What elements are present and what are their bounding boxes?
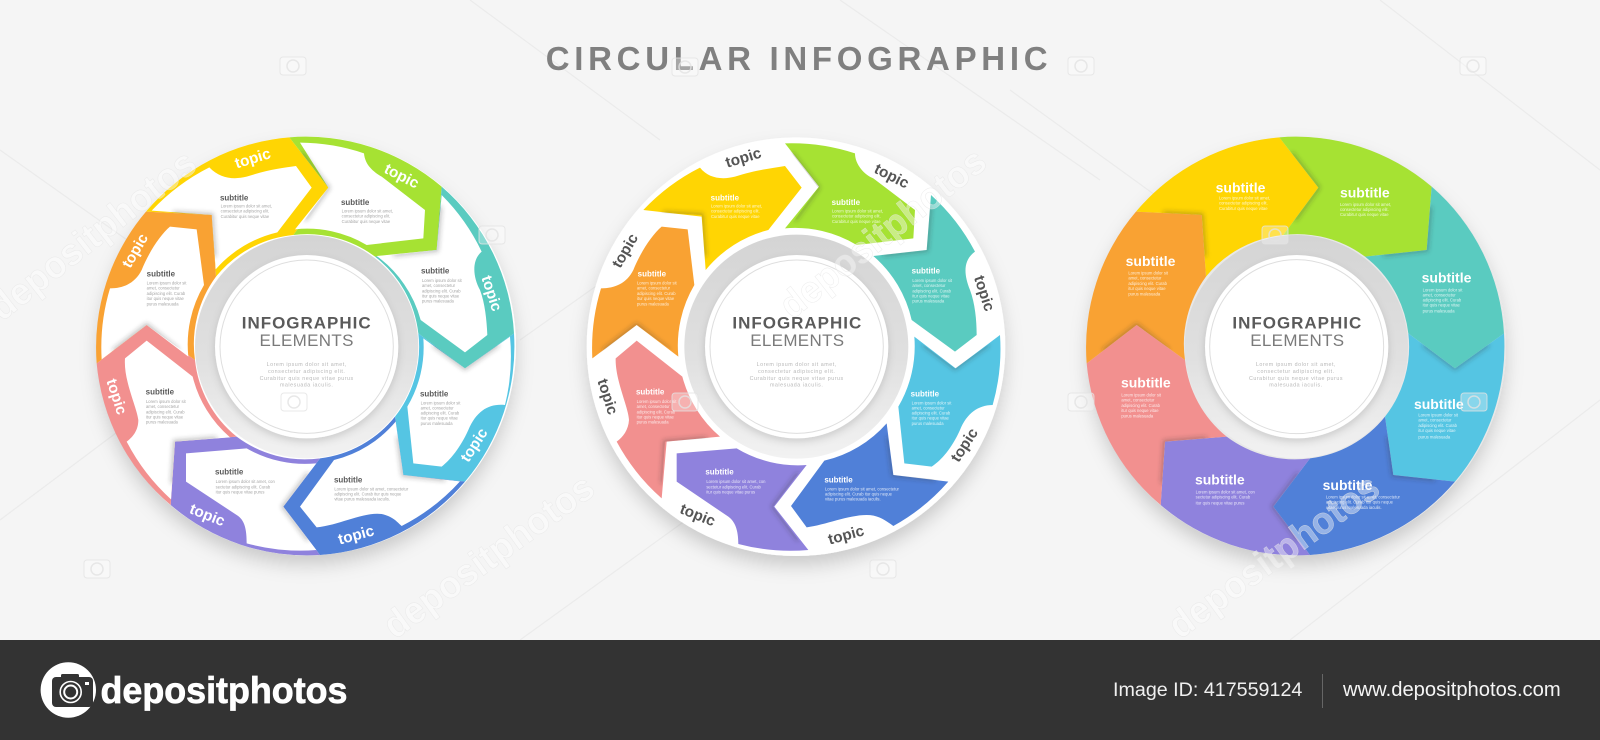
segment: yellow: Lorem ipsum dolor sit amet, <box>221 204 272 209</box>
segment: yellow: Curabitur quis neque vitae <box>221 214 270 219</box>
segment: purple <box>171 437 320 555</box>
segment: orange: purus malesuada <box>1128 292 1161 297</box>
segment: yellow: Lorem ipsum dolor sit amet, <box>1219 196 1270 201</box>
center text: INFOGRAPHIC <box>242 313 372 332</box>
segment: blue: subtitle <box>1323 477 1373 493</box>
segment: blue: subtitle <box>334 475 363 484</box>
segment: pink: topic <box>593 377 621 417</box>
center text: consectetur adipiscing elit. <box>1257 369 1335 375</box>
segment: teal <box>1365 187 1504 368</box>
segment: orange: topic <box>119 230 152 271</box>
segment: blue <box>791 423 948 548</box>
segment: purple: topic <box>677 501 718 530</box>
segment: green: subtitle <box>832 198 861 207</box>
segment: orange: purus malesuada <box>147 301 179 306</box>
segment: purple: itur quis neque vitae purus <box>216 490 264 495</box>
segment: purple: Lorem ipsum dolor sit amet, con <box>216 479 275 484</box>
segment: orange: purus malesuada <box>637 301 670 306</box>
segment: blue: topic <box>336 522 376 548</box>
segment: purple: sectetur adipiscing elit. Curab <box>216 484 271 489</box>
segment: green: Curabitur quis neque vitae <box>832 219 881 224</box>
watermark text and camera marks: depositphotos <box>1161 466 1388 647</box>
segment: yellow: topic <box>233 145 273 172</box>
segment: green: consectetur adipiscing elit. <box>1340 207 1389 212</box>
segment: pink: subtitle <box>1121 375 1171 391</box>
segment: orange: adipiscing elit. Curab <box>1128 281 1168 286</box>
segment: light blue: subtitle <box>1414 396 1464 412</box>
segment: green: subtitle <box>1340 184 1390 200</box>
segment: pink <box>593 341 720 498</box>
segment: yellow: Lorem ipsum dolor sit amet, <box>711 204 762 209</box>
center text: INFOGRAPHIC <box>1232 313 1362 332</box>
segment: yellow: consectetur adipiscing elit. <box>1219 201 1268 206</box>
segment: light blue: amet, consectetur <box>1418 418 1452 423</box>
segment: orange: itur quis neque vitae <box>147 296 185 301</box>
segment: teal: adipiscing elit. Curab <box>1423 298 1462 303</box>
segment: pink: Lorem ipsum dolor sit <box>146 399 187 404</box>
segment: teal <box>873 195 998 352</box>
segment: light blue: purus malesuada <box>1418 434 1451 439</box>
segment: light blue: subtitle <box>420 390 449 399</box>
segment: yellow: subtitle <box>220 193 249 202</box>
segment: green: Lorem ipsum dolor sit amet, <box>832 209 883 214</box>
watermark text and camera marks: depositphotos <box>376 466 603 647</box>
segment: light blue: itur quis neque vitae <box>912 416 950 421</box>
segment: orange: subtitle <box>1126 253 1176 269</box>
segment: yellow: consectetur adipiscing elit. <box>711 209 760 214</box>
segment: light blue: amet, consectetur <box>421 405 454 410</box>
center text: consectetur adipiscing elit. <box>268 369 345 375</box>
watermark text and camera marks: depositphotos <box>772 140 995 327</box>
segment: yellow: topic <box>723 145 764 172</box>
segment: green: consectetur adipiscing elit. <box>832 214 881 219</box>
panel: outlined circular infographic <box>96 137 516 555</box>
segment: yellow: consectetur adipiscing elit. <box>221 209 269 214</box>
segment: orange: adipiscing elit. Curab <box>147 291 186 296</box>
segment: green <box>289 137 442 257</box>
center text: Lorem ipsum dolor sit amet, <box>757 362 837 368</box>
segment: teal: subtitle <box>1422 269 1472 285</box>
segment: blue: subtitle <box>824 475 853 484</box>
segment: orange <box>592 227 694 358</box>
segment: teal: Lorem ipsum dolor sit <box>912 278 953 283</box>
segment: blue: adipiscing elit. Curab itur quis neque <box>825 491 893 496</box>
segment: teal: adipiscing elit. Curab <box>422 288 461 293</box>
center text: ELEMENTS <box>750 331 844 350</box>
segment: purple: sectetur adipiscing elit. Curab <box>706 484 762 489</box>
center text <box>732 313 862 389</box>
center text: Lorem ipsum dolor sit amet, <box>1256 362 1336 368</box>
segment: purple: Lorem ipsum dolor sit amet, con <box>1196 490 1255 495</box>
segment: orange: topic <box>609 230 642 271</box>
segment: teal: itur quis neque vitae <box>912 293 950 298</box>
segment: orange: amet, consectetur <box>147 286 180 291</box>
segment: purple: subtitle <box>215 467 244 476</box>
segment: purple <box>677 448 808 551</box>
segment: blue: Lorem ipsum dolor sit amet, consectetur <box>1326 494 1401 499</box>
segment: pink: adipiscing elit. Curab <box>146 409 185 414</box>
panel: filled arrows on white disc <box>587 137 1005 556</box>
center disc <box>1205 255 1388 438</box>
segment: light blue: Lorem ipsum dolor sit <box>1418 413 1459 418</box>
segment: light blue: topic <box>948 425 982 465</box>
segment: blue: adipiscing elit. Curab itur quis neque <box>334 491 402 496</box>
center text: malesuada iaculis. <box>770 383 823 389</box>
center text: malesuada iaculis. <box>280 383 333 389</box>
segment: teal: purus malesuada <box>912 299 945 304</box>
segment: blue: vitae purus malesuada iaculis. <box>1326 505 1382 510</box>
segment: purple: sectetur adipiscing elit. Curab <box>1196 495 1251 500</box>
segment: green: topic <box>871 161 912 193</box>
title: CIRCULAR INFOGRAPHIC <box>546 40 1052 77</box>
center text: ELEMENTS <box>1250 331 1344 350</box>
center ring <box>1185 235 1408 458</box>
segment: orange <box>96 212 216 363</box>
segment: purple: subtitle <box>1195 472 1245 488</box>
segment: pink: adipiscing elit. Curab <box>637 409 676 414</box>
segment: light blue: adipiscing elit. Curab <box>912 411 951 416</box>
segment: teal <box>375 187 514 368</box>
segment: pink: subtitle <box>146 388 175 397</box>
segment: purple: itur quis neque vitae purus <box>1196 500 1244 505</box>
segment: light blue: Lorem ipsum dolor sit <box>912 400 952 405</box>
center ring <box>195 235 418 458</box>
segment: yellow: Curabitur quis neque vitae <box>1219 206 1268 211</box>
segment: blue <box>283 417 465 555</box>
segment: pink: itur quis neque vitae <box>1121 408 1159 413</box>
segment: orange: Lorem ipsum dolor sit <box>1128 271 1169 276</box>
segment: teal: Lorem ipsum dolor sit <box>1423 287 1463 292</box>
logo wordmark: depositphotos <box>100 670 348 711</box>
center disc <box>215 255 398 438</box>
segment: purple <box>1161 437 1310 555</box>
segment: pink: amet, consectetur <box>637 404 670 409</box>
segment: pink: purus malesuada <box>1121 414 1154 419</box>
center text: Lorem ipsum dolor sit amet, <box>267 362 347 368</box>
segment: light blue: purus malesuada <box>912 421 944 426</box>
center text: ELEMENTS <box>260 331 354 350</box>
segment: light blue: itur quis neque vitae <box>1418 428 1456 433</box>
segment: pink: subtitle <box>636 388 665 397</box>
center text: INFOGRAPHIC <box>732 313 862 332</box>
segment: orange: itur quis neque vitae <box>637 296 675 301</box>
segment: blue: vitae purus malesuada iaculis. <box>334 497 390 502</box>
segment: green: consectetur adipiscing elit. <box>342 214 390 219</box>
segment: orange: adipiscing elit. Curab <box>637 291 676 296</box>
segment: light blue: purus malesuada <box>421 421 453 426</box>
center text: Curabitur quis neque vitae purus <box>260 376 354 382</box>
segment: green <box>1279 137 1432 257</box>
segment: teal: itur quis neque vitae <box>422 293 460 298</box>
segment: orange: subtitle <box>638 269 667 278</box>
icon: depositphotos camera logo <box>41 662 96 718</box>
segment: blue <box>1273 417 1455 555</box>
segment: blue: topic <box>826 522 866 548</box>
center text <box>1232 313 1362 389</box>
segment: purple: Lorem ipsum dolor sit amet, con <box>706 479 766 484</box>
segment: teal: subtitle <box>912 267 941 276</box>
segment: teal: Lorem ipsum dolor sit <box>422 278 463 283</box>
segment: yellow: subtitle <box>1216 179 1266 195</box>
segment: green: subtitle <box>341 198 370 207</box>
segment: pink: Lorem ipsum dolor sit <box>1121 393 1162 398</box>
disc base <box>97 137 516 555</box>
segment: purple: topic <box>187 501 228 530</box>
segment: green <box>785 143 915 245</box>
panel: solid colour wheel <box>1086 137 1506 555</box>
segment: pink: Lorem ipsum dolor sit <box>637 399 677 404</box>
center text: Curabitur quis neque vitae purus <box>1249 376 1343 382</box>
segment: blue: vitae purus malesuada iaculis. <box>825 497 881 502</box>
segment: orange: amet, consectetur <box>637 286 671 291</box>
segment: light blue <box>1385 333 1504 482</box>
segment: yellow <box>146 137 328 277</box>
segment: teal: adipiscing elit. Curab <box>912 288 952 293</box>
center text <box>242 313 372 389</box>
image id: Image ID: 417559124 <box>1113 679 1302 701</box>
segment: light blue: Lorem ipsum dolor sit <box>421 400 461 405</box>
segment: teal: itur quis neque vitae <box>1423 303 1461 308</box>
segment: purple: itur quis neque vitae purus <box>706 490 755 495</box>
segment: teal: purus malesuada <box>422 299 455 304</box>
segment: yellow <box>1136 137 1318 277</box>
segment: teal: subtitle <box>421 267 450 276</box>
segment: light blue <box>898 335 1000 467</box>
segment: pink <box>1087 325 1227 505</box>
segment: green: Lorem ipsum dolor sit amet, <box>342 209 393 214</box>
segment: orange: itur quis neque vitae <box>1128 286 1166 291</box>
disc base <box>1087 137 1506 555</box>
disc base <box>587 137 1005 556</box>
center text: consectetur adipiscing elit. <box>758 369 835 375</box>
segment: light blue: adipiscing elit. Curab <box>1418 423 1458 428</box>
segment: pink: purus malesuada <box>146 420 179 425</box>
segment: orange <box>1086 212 1206 363</box>
segment: blue: adipiscing elit. Curab itur quis neque <box>1326 499 1394 504</box>
segment: orange: amet, consectetur <box>1128 276 1162 281</box>
segment: light blue: topic <box>457 425 492 465</box>
segment: orange: Lorem ipsum dolor sit <box>637 281 678 286</box>
segment: light blue: itur quis neque vitae <box>421 416 459 421</box>
center ring <box>684 235 908 459</box>
segment: teal: amet, consectetur <box>912 283 946 288</box>
watermark text and camera marks <box>0 57 1487 647</box>
segment: green: Lorem ipsum dolor sit amet, <box>1340 202 1391 207</box>
segment: teal: purus malesuada <box>1423 309 1455 314</box>
segment: green: Curabitur quis neque vitae <box>1340 212 1389 217</box>
center disc <box>705 255 888 438</box>
segment: teal: topic <box>477 273 505 314</box>
segment: orange: subtitle <box>147 269 176 278</box>
segment: light blue: adipiscing elit. Curab <box>421 411 460 416</box>
website: www.depositphotos.com <box>1342 679 1561 701</box>
footer bar <box>0 640 1600 740</box>
segment: pink: topic <box>102 377 130 417</box>
segment: yellow: subtitle <box>711 193 740 202</box>
segment: pink: itur quis neque vitae <box>146 414 184 419</box>
segment: teal: topic <box>970 273 998 314</box>
segment: blue: Lorem ipsum dolor sit amet, consectetur <box>825 486 900 491</box>
segment: blue: Lorem ipsum dolor sit amet, consectetur <box>334 486 409 491</box>
segment: pink: purus malesuada <box>637 420 669 425</box>
segment: light blue: subtitle <box>911 390 940 399</box>
segment: purple: subtitle <box>705 467 734 476</box>
segment: orange: Lorem ipsum dolor sit <box>147 281 187 286</box>
segment: light blue <box>395 333 514 482</box>
segment: pink: adipiscing elit. Curab <box>1121 403 1161 408</box>
segment: green: Curabitur quis neque vitae <box>342 219 391 224</box>
segment: yellow: Curabitur quis neque vitae <box>711 214 760 219</box>
segment: yellow <box>643 145 802 270</box>
center text: Curabitur quis neque vitae purus <box>750 376 844 382</box>
segment: teal: amet, consectetur <box>422 283 456 288</box>
segment: pink: amet, consectetur <box>1121 398 1155 403</box>
center text: malesuada iaculis. <box>1269 383 1323 389</box>
segment: green: topic <box>381 161 422 193</box>
segment: teal: amet, consectetur <box>1423 292 1456 297</box>
segment: pink: amet, consectetur <box>146 404 180 409</box>
segment: pink: itur quis neque vitae <box>637 414 675 419</box>
segment: light blue: amet, consectetur <box>912 405 945 410</box>
segment: pink <box>97 325 237 505</box>
